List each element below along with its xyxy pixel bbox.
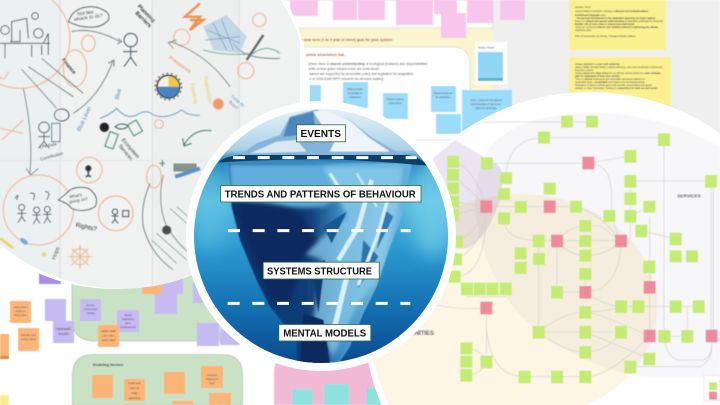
sticky note labels: professional bbox=[120, 325, 136, 329]
label: mental models: MENTAL MODELS bbox=[283, 328, 367, 340]
sketch: dark arrows and ink bbox=[22, 30, 280, 270]
sketch handwriting: Finance bbox=[60, 57, 77, 76]
red system nodes bbox=[480, 157, 718, 342]
blue sticky text: adaptation bbox=[349, 96, 361, 99]
sketch handwriting: Planning bbox=[136, 4, 156, 24]
panel: top workshop board bbox=[270, 0, 720, 200]
sketch handwriting bbox=[39, 4, 245, 261]
panel: upper white area with pink notes bbox=[270, 0, 493, 28]
sticky note labels: planning bbox=[129, 396, 141, 400]
panel: photo of hand-drawn river sketch bbox=[0, 0, 310, 300]
label: trends and patterns of behaviour bbox=[220, 186, 421, 202]
yellow note: upper: there is a shared and agreed understanding of adaptation pathways for flood risk bbox=[575, 20, 664, 23]
sketch: stick figure groups bbox=[15, 109, 129, 224]
sketch handwriting: Contribution bbox=[40, 151, 64, 162]
yellow note: upper: purpose: foster bbox=[575, 6, 591, 9]
sticky note labels: using the bbox=[207, 374, 218, 377]
sketch handwriting: Barriers bbox=[134, 11, 152, 29]
yellow note: upper: institutional language used bbox=[575, 14, 606, 17]
sticky note labels: Hydraulic bbox=[56, 327, 71, 331]
sketch handwriting: Blue Level bbox=[76, 106, 93, 133]
heading: goal question: Your near term (1 to 3 year or more) goal for your system: bbox=[295, 38, 393, 42]
sticky note labels: Europe bbox=[87, 304, 95, 307]
yellow note: lower: long-term actions bbox=[575, 69, 594, 72]
yellow note: upper: using our combined network and resilient network in delivering the climate bbox=[575, 26, 659, 29]
panel: yellow goal area bbox=[270, 0, 493, 140]
sketch: blue water line bbox=[100, 108, 200, 118]
yellow note: lower bbox=[569, 57, 671, 115]
map legend bbox=[704, 375, 720, 401]
zone: purple overlap bbox=[433, 140, 502, 248]
panel: right systems map bbox=[343, 92, 720, 405]
iceberg above water bbox=[240, 109, 407, 155]
sketch: speech bubbles bbox=[58, 7, 109, 210]
yellow note: upper: connect here to networks / having a collected and institutionalised bbox=[575, 10, 649, 13]
purple sticky notes bbox=[39, 272, 240, 346]
sticky note labels: tech to bbox=[130, 386, 139, 390]
text: systems statement: tem where there is shared understanding of ecological problems and responsibilities bbox=[302, 62, 428, 66]
yellow note: lower: designs on short timescales, leading to competition for land use and assets bbox=[575, 87, 658, 90]
blue sticky text: Policies support bbox=[387, 98, 404, 101]
sketch handwriting: Pressures bbox=[167, 55, 192, 75]
sticky note labels: you can bbox=[103, 334, 114, 338]
text: systems statement: ro use of GIS/LiDAR WPP research for decision making bbox=[302, 77, 383, 81]
blue sticky text: knowledge of bbox=[348, 92, 362, 95]
sticky note labels: tools and bbox=[128, 381, 141, 385]
label: services: SERVICES bbox=[677, 193, 701, 198]
sticky note labels: flood bbox=[209, 382, 215, 385]
yellow note: lower: There is shared understood and actionable framework adapted to bbox=[575, 78, 645, 81]
yellow note: upper: 40% of households are saving, managed climate resilient bbox=[575, 35, 636, 38]
blue sticky text: Ability to share bbox=[347, 88, 364, 91]
label: communities: COMMUNITIES bbox=[391, 331, 434, 337]
label: systems structure bbox=[263, 262, 379, 279]
yellow note: lower: plan for adaptation of blue-tree corridor bbox=[575, 75, 620, 78]
sketch: orange circles bbox=[0, 0, 266, 268]
yellow note: lower: Using a basis of a clear vision for our climate actions which is a clear strategic bbox=[575, 72, 661, 75]
map connector lines bbox=[437, 122, 713, 377]
sticky note labels: work with bbox=[102, 338, 115, 342]
panel: green theme area upper bbox=[72, 270, 290, 341]
label: events bbox=[296, 125, 346, 142]
sketch handwriting: Rights? bbox=[75, 222, 98, 233]
pink sticky notes bbox=[290, 0, 525, 38]
sketch handwriting: What's bbox=[69, 192, 82, 199]
label: trends and patterns of behaviour: TRENDS AND PATTERNS OF BEHAVIOUR bbox=[225, 190, 416, 200]
sketch: yellow and blue marks bbox=[0, 238, 13, 248]
sticky note labels: being bbox=[124, 313, 132, 317]
sketch: green arrow bbox=[183, 130, 212, 146]
blue sticky text: for adaptation bbox=[436, 96, 451, 99]
sketch handwriting: Ecosystem bbox=[120, 137, 140, 160]
icon: pie clock bbox=[155, 73, 182, 100]
yellow note: upper: adaptation plan bbox=[575, 29, 592, 32]
sticky note labels: rationale open bbox=[21, 334, 37, 337]
blue sticky notes bbox=[304, 82, 512, 135]
sticky sheet card bbox=[475, 42, 507, 84]
sticky note labels: value staff bbox=[101, 329, 116, 333]
sketch: blue building hatch bbox=[203, 15, 247, 53]
sketch: central stick figure bbox=[123, 33, 137, 67]
yellow note: lower: using a short- to mid- focus: enables planning, clear and coordinated actions and bbox=[575, 66, 663, 69]
yellow note: upper: - strong local involvement in the adaptation planning for future against bbox=[575, 17, 656, 20]
panel: inner white goal card bbox=[270, 47, 470, 140]
sticky note labels: policy which bbox=[14, 306, 28, 309]
zone: communities bbox=[343, 194, 657, 405]
yellow note: upper: flexible role of every team is shared and understood bbox=[575, 23, 635, 26]
blue sticky text: within the landscape bbox=[475, 107, 497, 110]
label: systems structure: SYSTEMS STRUCTURE bbox=[267, 266, 372, 278]
blue sticky text: collaboration bbox=[388, 102, 402, 105]
sticky sheet card: Sticky sheet bbox=[478, 46, 494, 50]
yellow note: lower: Strategies of which a vehicle gets multi-benefits: fund-holders and grants bbox=[575, 84, 653, 87]
paper folds bbox=[0, 12, 60, 260]
sticky note labels: faster place bbox=[14, 314, 27, 317]
sketch handwriting: Hops bbox=[51, 246, 61, 261]
sketch: orange lightning bbox=[185, 3, 203, 30]
iceberg below water bbox=[228, 163, 412, 367]
sticky note labels: help bbox=[132, 391, 138, 395]
text: systems statement bbox=[300, 53, 428, 81]
blue sticky text bbox=[347, 88, 502, 110]
orange sticky notes bbox=[0, 280, 231, 405]
yellow note: upper bbox=[569, 0, 666, 50]
sketch handwriting: Regulation bbox=[202, 76, 213, 104]
sticky note labels: enables a bbox=[15, 310, 26, 313]
blue sticky text: Users, customers and agreed bbox=[470, 99, 502, 102]
label: mental models bbox=[279, 324, 371, 341]
sketch handwriting: Life Safe bbox=[39, 141, 58, 149]
sticky note labels: funding bbox=[87, 312, 95, 315]
sketch handwriting: Time to bbox=[229, 94, 245, 109]
text: systems statement: r benefits of blue green infrastructure are understood bbox=[302, 67, 379, 71]
panel: iceberg circle bbox=[186, 101, 457, 371]
dashed level lines bbox=[228, 158, 417, 303]
sticky note labels: review, repeat bbox=[21, 338, 36, 341]
blue sticky text: understanding of how to use bbox=[471, 103, 502, 106]
sketch: meeting table figures bbox=[0, 13, 50, 58]
sketch handwriting: Funding bbox=[189, 83, 198, 104]
label: events: EVENTS bbox=[300, 129, 341, 140]
icon: turbine and lamp bbox=[100, 120, 142, 149]
sketch handwriting: Not like bbox=[77, 9, 94, 18]
panel: lower-left theme board bbox=[0, 270, 290, 405]
sketch handwriting: going on? bbox=[69, 196, 89, 204]
sketch handwriting: Services bbox=[117, 143, 134, 162]
sticky note labels: trained to bbox=[122, 317, 134, 321]
sticky note labels: Hatepers in bbox=[206, 378, 219, 381]
sketch: lower right trees and river bbox=[152, 160, 200, 263]
sketch handwriting: Blue bbox=[114, 88, 123, 101]
sticky note labels: Government bbox=[84, 308, 97, 311]
panel: pink bottom area bbox=[274, 352, 395, 405]
teal sticky notes bbox=[292, 384, 388, 405]
sticky note labels: model bbox=[59, 332, 69, 336]
heading: enabling themes: Enabling themes bbox=[93, 363, 123, 367]
sticky note labels: as a bbox=[125, 321, 131, 325]
text: systems statement: tion makers are supported by accessible policy and legislation for adaptation bbox=[302, 72, 414, 76]
sketch handwriting: flood bbox=[227, 100, 239, 111]
zone: services bbox=[475, 113, 720, 377]
yellow note: lower: climate adaptation is seen and owned by bbox=[575, 63, 620, 66]
ice streaks and shadows bbox=[312, 173, 393, 330]
waterline band bbox=[218, 155, 427, 166]
sticky note labels bbox=[14, 304, 219, 400]
green system nodes bbox=[447, 116, 717, 383]
sketch handwriting: whack to do? bbox=[73, 13, 104, 23]
yellow note: lower: household scale - sustainable and linked to the developing areas bbox=[575, 81, 645, 84]
panel: enabling themes bbox=[72, 354, 242, 405]
text: systems statement: A systems whole/where that... bbox=[300, 53, 347, 57]
blue sticky text: Shared resources bbox=[434, 92, 453, 95]
sea and sky gradient bbox=[190, 109, 453, 364]
